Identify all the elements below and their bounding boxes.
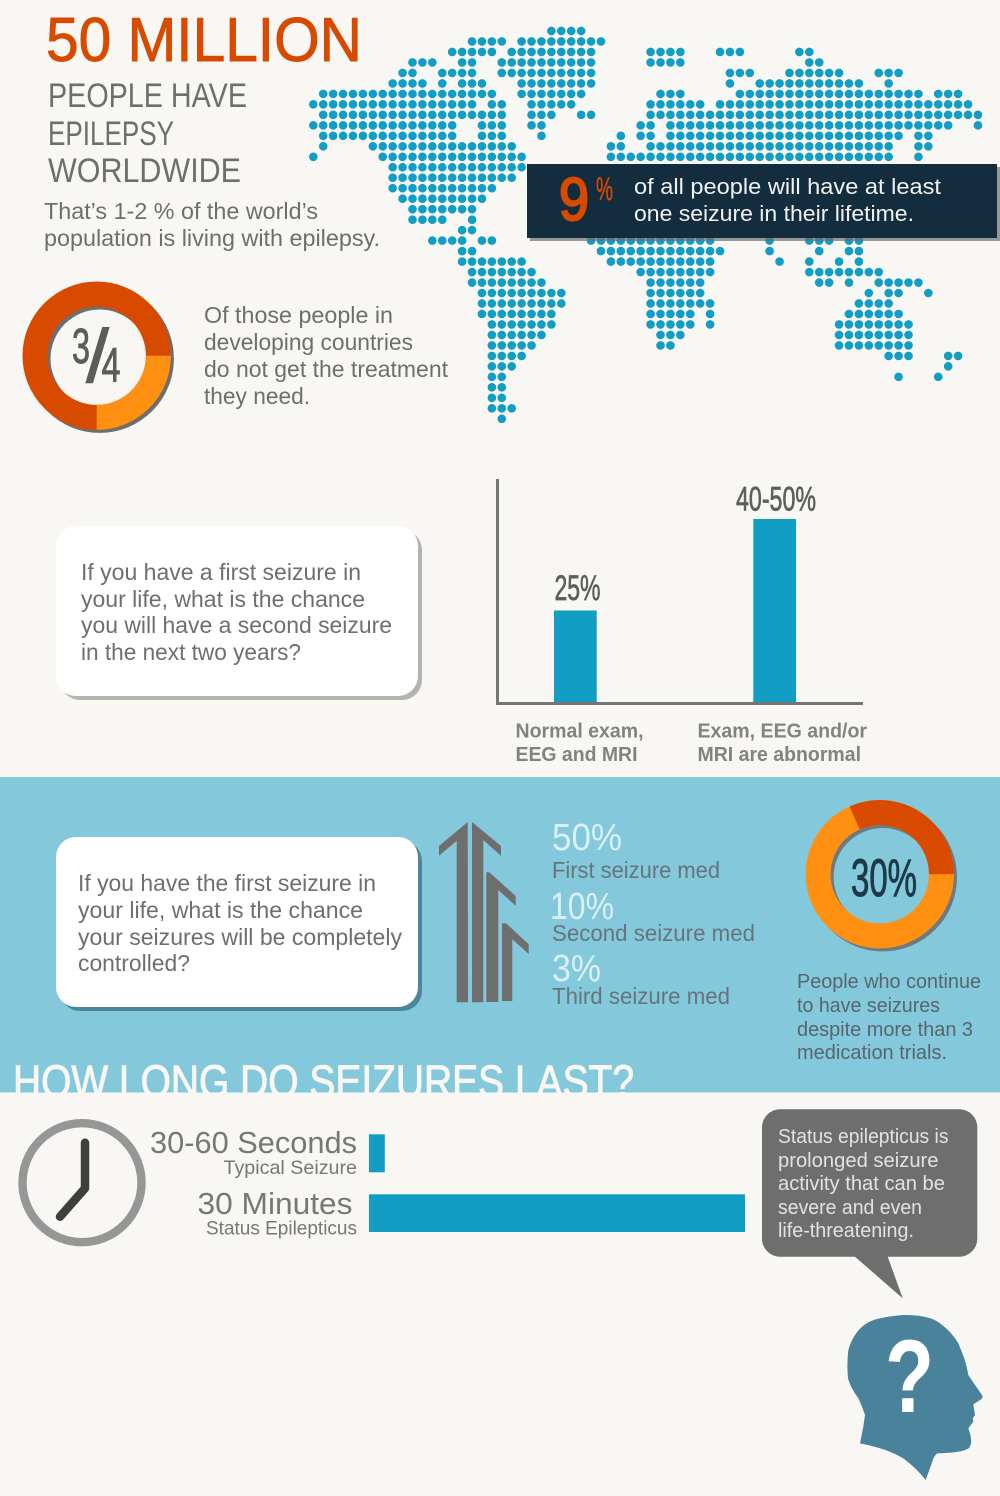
text: developing countries: developing countries bbox=[204, 329, 413, 355]
icon: head with question mark bbox=[847, 1315, 983, 1480]
text: continuing seizures: People who continue bbox=[797, 970, 981, 993]
bar chart: second seizure chance: EEG and MRI bbox=[516, 744, 638, 766]
panel: second seizure question: in the next two years? bbox=[81, 639, 301, 665]
heading: people have epilepsy worldwide: EPILEPSY bbox=[48, 115, 174, 153]
callout: 9 percent: % bbox=[596, 171, 613, 207]
text: medication success rates: First seizure med bbox=[552, 857, 720, 883]
bar chart: second seizure chance: 25% bbox=[554, 569, 600, 608]
donut chart: three quarters: 4 bbox=[102, 340, 120, 392]
panel: second seizure question: If you have a first seizure in bbox=[81, 559, 361, 585]
donut chart: 30 percent bbox=[818, 812, 944, 939]
panel: seizure control question: controlled? bbox=[78, 950, 190, 976]
text: continuing seizures: despite more than 3 bbox=[797, 1018, 973, 1041]
text: share of world population: That’s 1-2 % of the world’s bbox=[44, 198, 318, 224]
icon: stepped up arrows bbox=[439, 822, 529, 1002]
panel: second seizure question: your life, what is the chance bbox=[81, 586, 365, 612]
panel: second seizure question bbox=[56, 526, 422, 700]
dotted world map bbox=[313, 31, 978, 419]
text: share of world population: population is living with epilepsy. bbox=[44, 225, 380, 251]
text: 30 minutes label: 30 Minutes bbox=[198, 1186, 352, 1221]
callout: status epilepticus speech bubble bbox=[762, 1109, 977, 1298]
text: developing countries: they need. bbox=[204, 383, 310, 409]
text: share of world population bbox=[44, 198, 380, 251]
text: 30-60 seconds label: Typical Seizure bbox=[224, 1157, 357, 1179]
callout: status epilepticus speech bubble: life-threatening. bbox=[778, 1220, 914, 1242]
text: continuing seizures bbox=[797, 970, 981, 1064]
callout: status epilepticus speech bubble: prolonged seizure bbox=[778, 1150, 938, 1172]
text: 30 minutes label: Status Epilepticus bbox=[206, 1218, 357, 1240]
panel: blue band bbox=[0, 777, 1000, 1092]
callout: 9 percent bbox=[527, 164, 1000, 241]
icon: head with question mark: ? bbox=[885, 1319, 934, 1435]
callout: 9 percent: of all people will have at least bbox=[634, 174, 942, 199]
bar chart: second seizure chance: MRI are abnormal bbox=[698, 744, 861, 766]
bar chart: seizure duration bbox=[369, 1134, 745, 1232]
panel: seizure control question: your seizures will be completely bbox=[78, 924, 402, 950]
panel: seizure control question: If you have the first seizure in bbox=[78, 870, 376, 896]
text: medication success rates: 50% bbox=[552, 817, 622, 859]
donut chart: 30 percent: 30% bbox=[851, 849, 917, 908]
heading: people have epilepsy worldwide: WORLDWIDE bbox=[48, 152, 241, 190]
callout: status epilepticus speech bubble: activity that can be bbox=[778, 1173, 945, 1195]
text: 30-60 seconds label: 30-60 Seconds bbox=[150, 1125, 357, 1160]
panel: second seizure question: you will have a second seizure bbox=[81, 612, 392, 638]
text: medication success rates bbox=[550, 817, 755, 1009]
heading: people have epilepsy worldwide: PEOPLE HAVE bbox=[48, 77, 247, 115]
icon: clock bbox=[22, 1123, 142, 1242]
text: continuing seizures: medication trials. bbox=[797, 1041, 947, 1064]
callout: 9 percent: 9 bbox=[559, 166, 589, 233]
text: 30-60 seconds label bbox=[150, 1125, 357, 1179]
bar chart: second seizure chance bbox=[498, 479, 867, 766]
bar chart: second seizure chance: 40-50% bbox=[736, 480, 816, 518]
text: medication success rates: 3% bbox=[552, 948, 601, 990]
title: 50 million: 50 MILLION bbox=[46, 6, 362, 75]
text: continuing seizures: to have seizures bbox=[797, 994, 940, 1017]
text: medication success rates: Second seizure med bbox=[552, 920, 755, 946]
donut chart: three quarters bbox=[35, 294, 161, 420]
heading: how long do seizures last: HOW LONG DO SEIZURES LAST? bbox=[13, 1056, 634, 1107]
text: medication success rates: 10% bbox=[550, 886, 614, 928]
heading: people have epilepsy worldwide bbox=[48, 77, 247, 190]
bar chart: second seizure chance: Exam, EEG and/or bbox=[698, 720, 867, 742]
donut chart: three quarters: / bbox=[86, 314, 109, 398]
text: developing countries bbox=[204, 302, 449, 409]
donut chart: three quarters: 3 bbox=[72, 320, 90, 374]
callout: status epilepticus speech bubble: severe and even bbox=[778, 1197, 922, 1219]
panel: seizure control question bbox=[56, 837, 422, 1011]
text: developing countries: do not get the treatment bbox=[204, 356, 449, 382]
text: 30 minutes label bbox=[198, 1186, 357, 1240]
text: developing countries: Of those people in bbox=[204, 302, 393, 328]
bar chart: second seizure chance: Normal exam, bbox=[516, 720, 644, 742]
callout: status epilepticus speech bubble: Status epilepticus is bbox=[778, 1126, 948, 1148]
panel: seizure control question: your life, what is the chance bbox=[78, 897, 363, 923]
callout: 9 percent: one seizure in their lifetime. bbox=[634, 201, 914, 226]
text: medication success rates: Third seizure med bbox=[552, 983, 730, 1009]
